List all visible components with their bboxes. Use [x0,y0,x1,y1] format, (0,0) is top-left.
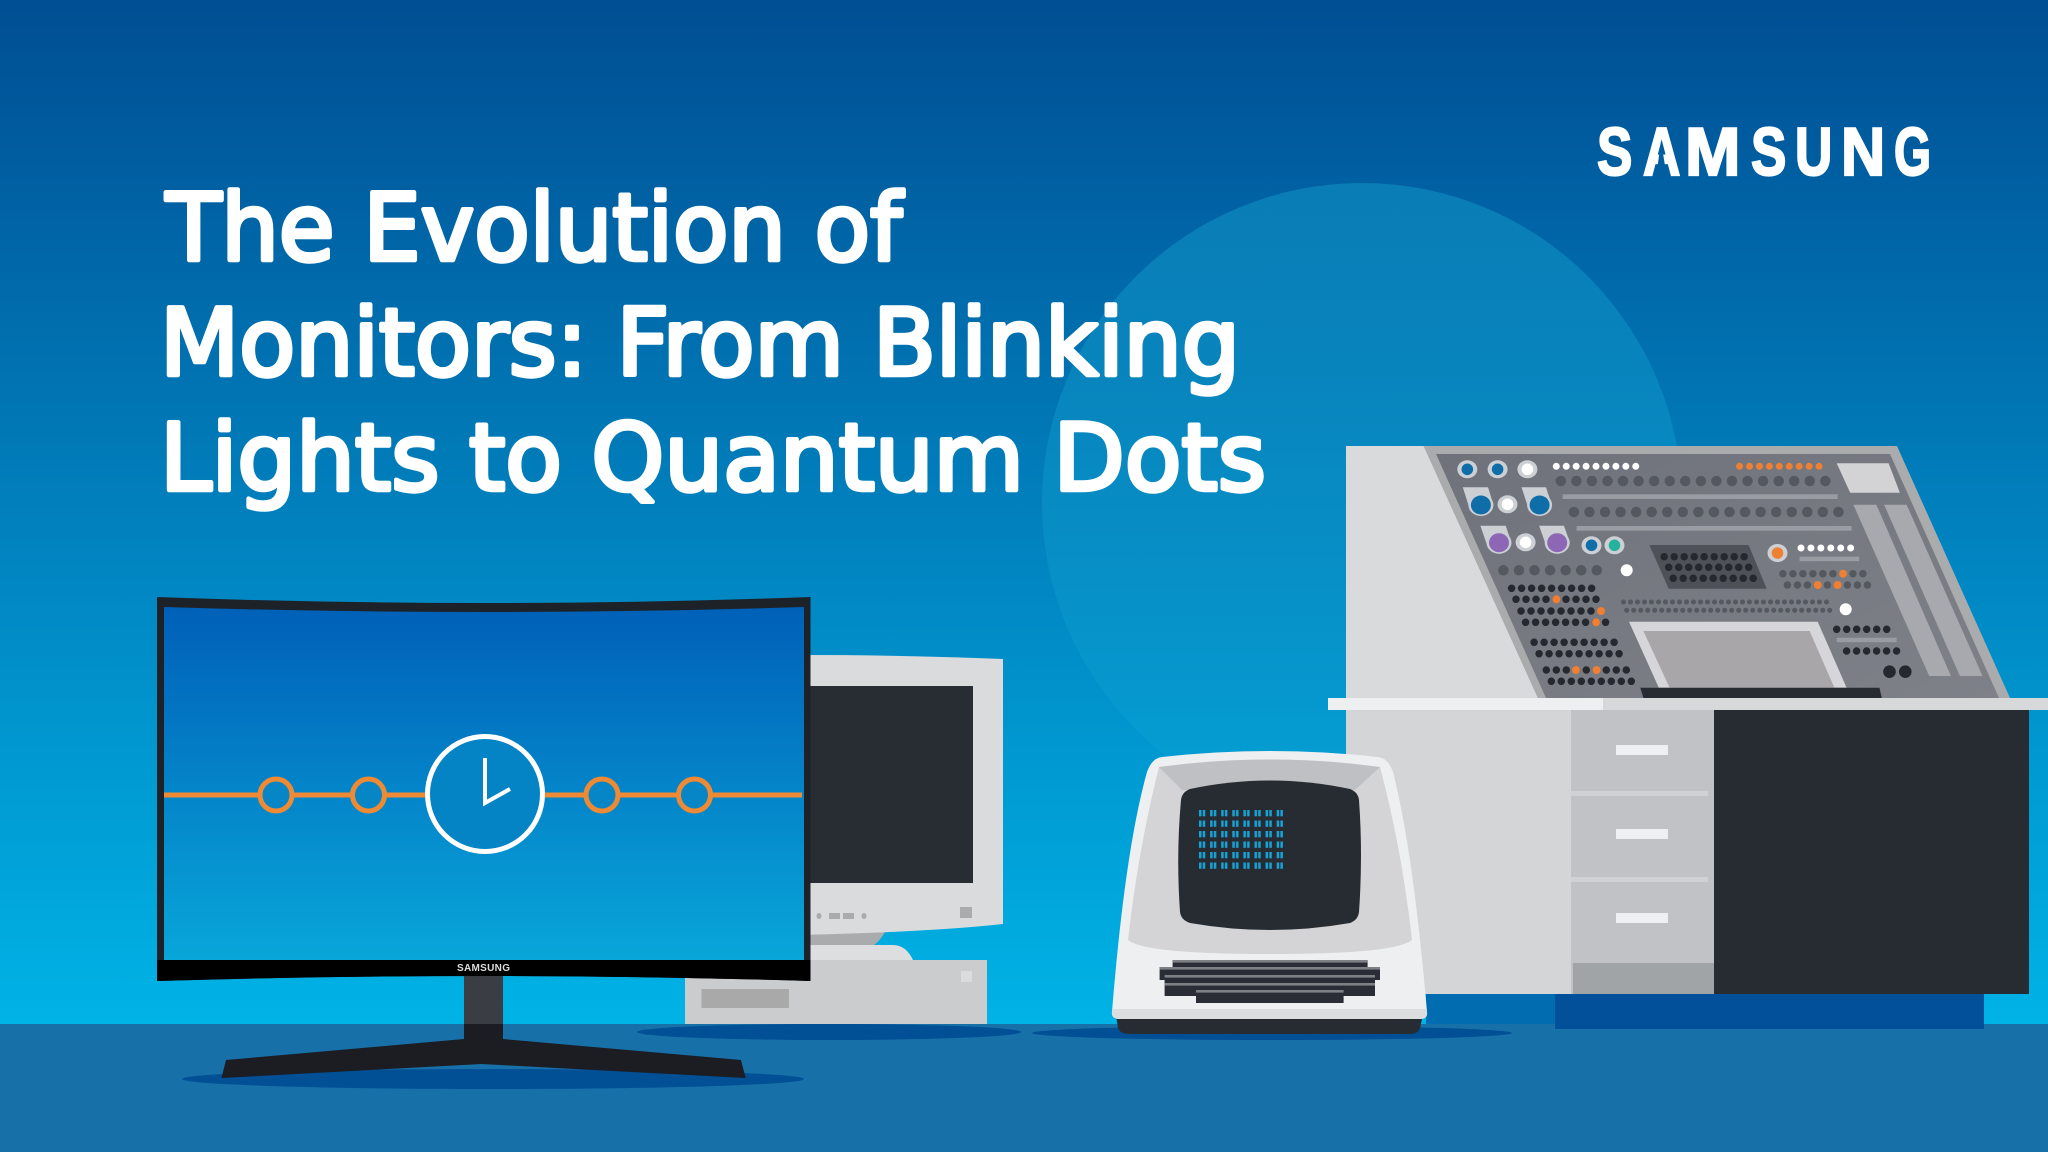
keyboard [1160,960,1380,1003]
desk body [1346,710,1572,994]
title: The Evolution of [165,174,904,282]
monitor shadow [182,1069,804,1089]
knobs [1457,460,1788,562]
desktop [1328,698,2048,710]
base unit [685,960,987,1024]
console cabinet side [1346,446,1538,698]
drawers [1571,710,1714,994]
Samsung logo: M [1685,114,1741,190]
title [160,174,1266,512]
Samsung logo: S [1597,114,1632,189]
terminal screen [1178,780,1361,930]
curved Samsung monitor [157,597,810,1089]
dark cabinet door [1714,710,2029,994]
Samsung logo: N [1841,113,1885,190]
terminal recess [1128,760,1412,954]
CRT stand [800,930,886,948]
monitor brand label: SAMSUNG [457,963,510,974]
title: Lights to Quantum Dots [160,404,1266,512]
Samsung logo: A [1643,113,1680,190]
monitor frame [157,597,810,981]
terminal shadow [1032,1026,1512,1040]
terminal recess top [1159,760,1380,790]
plate [800,945,913,960]
panel bars [1563,494,1897,642]
screen dot matrix [1199,810,1284,870]
title: Monitors: From Blinking [160,289,1240,397]
panel display [1629,622,1882,698]
angled control panel [1424,446,2010,698]
floor [0,1024,2048,1152]
vintage computer terminal [1032,751,1512,1040]
terminal body [1112,751,1427,1019]
dark dot block [1649,545,1767,589]
vintage control console desk [1328,446,2048,1029]
computer shadow [637,1024,1021,1040]
monitor stand [222,976,746,1078]
icon: clock [428,736,542,852]
Samsung logo: U [1795,113,1832,190]
desk floor shadow [1426,994,1984,1029]
monitor chin [157,960,810,981]
Samsung logo [1597,113,1931,190]
timeline graphic [164,736,802,852]
terminal lower trim [1112,1009,1427,1019]
panel label plate and slats [1837,463,1982,676]
CRT monitor [800,655,1003,935]
decorative circle [1042,183,1682,823]
orange and white accent dots [1552,564,1912,678]
old CRT desktop computer [637,655,1021,1040]
Samsung logo: S [1751,114,1786,189]
Samsung logo: G [1894,115,1931,190]
monitor screen [164,607,804,960]
indicator light rows [1503,466,1898,681]
terminal base [1116,1015,1423,1034]
